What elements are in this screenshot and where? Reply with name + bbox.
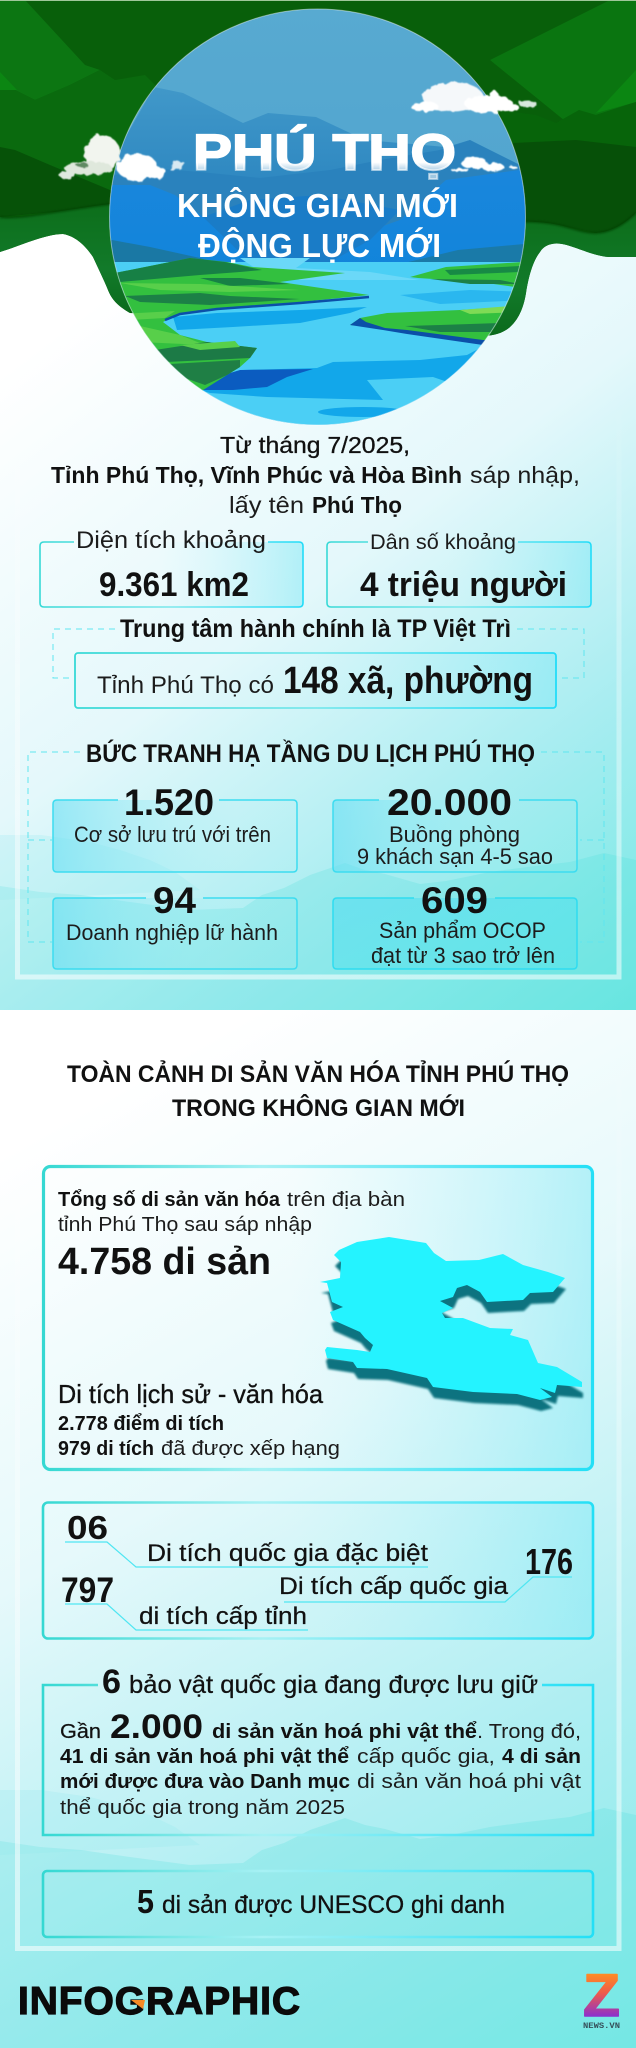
admin centre group: Trung tâm hành chính là TP Việt Trì <box>120 615 511 643</box>
intro text: lấy tên <box>229 492 304 518</box>
card: rooms: 9 khách sạn 4-5 sao <box>357 844 553 869</box>
panel: heritage total with map: 2.778 điểm di tích <box>58 1413 224 1435</box>
panel: heritage total with map: 979 di tích <box>58 1438 154 1460</box>
panel: relic classification <box>43 1502 593 1638</box>
panel: UNESCO: di sản được UNESCO ghi danh <box>162 1891 505 1919</box>
card: accommodation: Cơ sở lưu trú với trên <box>74 822 271 847</box>
panel: relic classification: 176 <box>525 1541 573 1582</box>
logo: Z News: Z <box>583 1962 620 2029</box>
card: travel companies <box>53 880 297 969</box>
background: top section gradient <box>0 0 636 1010</box>
panel: relic classification: 06 <box>67 1509 108 1546</box>
panel: national treasures and intangible heritage: 6 <box>102 1663 121 1701</box>
title <box>177 124 458 264</box>
panel: national treasures and intangible heritage: mới được đưa vào Danh mục <box>60 1771 350 1793</box>
panel: heritage total with map: đã được xếp hạng <box>161 1438 340 1460</box>
background: mountains lower section <box>0 1790 636 2048</box>
logo: Z News: NEWS.VN <box>583 2022 620 2031</box>
circle rim <box>110 9 526 425</box>
panel: national treasures and intangible heritage: Gần <box>60 1721 101 1743</box>
stat box: area: Diện tích khoảng <box>76 527 266 554</box>
card: OCOP: đạt từ 3 sao trở lên <box>371 943 555 968</box>
tourism heading with dashed frame: BỨC TRANH HẠ TẦNG DU LỊCH PHÚ THỌ <box>86 738 535 768</box>
stat box: area: 9.361 km2 <box>99 566 249 604</box>
panel: national treasures and intangible heritage: di sản văn hoá phi vật thể <box>212 1721 477 1743</box>
panel: national treasures and intangible heritage: thể quốc gia trong năm 2025 <box>60 1797 345 1819</box>
admin centre group: Tỉnh Phú Thọ có <box>97 672 274 699</box>
panel: national treasures and intangible heritage <box>43 1663 593 1835</box>
logo: INFOGRAPHIC wordmark: INFOGRAPHIC <box>18 1980 300 2023</box>
panel: relic classification: di tích cấp tỉnh <box>139 1603 307 1630</box>
section heading: TRONG KHÔNG GIAN MỚI <box>172 1094 465 1122</box>
intro text <box>51 432 580 518</box>
admin centre group <box>53 615 584 708</box>
stat box: area <box>40 527 303 607</box>
card: OCOP: Sản phẩm OCOP <box>379 918 546 943</box>
cloud: left <box>59 135 186 181</box>
tourism heading with dashed frame <box>28 738 604 942</box>
header: green hills with wavy edge <box>0 0 636 336</box>
panel: heritage total with map: Di tích lịch sử - văn hóa <box>58 1379 324 1409</box>
panel frame: lower section <box>18 1030 619 1948</box>
panel: relic classification: Di tích cấp quốc gia <box>279 1573 509 1600</box>
card: accommodation: 1.520 <box>124 782 214 823</box>
title: PHÚ THỌ <box>193 124 456 181</box>
panel: national treasures and intangible heritage: . Trong đó, <box>477 1721 581 1743</box>
intro text: Từ tháng 7/2025, <box>220 432 410 458</box>
panel: heritage total with map: 4.758 di sản <box>58 1241 271 1283</box>
title: ĐỘNG LỰC MỚI <box>198 226 441 264</box>
header: top edge line <box>0 0 636 1</box>
cloud: right top <box>411 82 537 113</box>
panel frame: top section <box>18 400 619 977</box>
panel: relic classification: 797 <box>61 1571 114 1610</box>
panel: UNESCO: 5 <box>137 1883 154 1920</box>
card: rooms: 20.000 <box>387 782 512 823</box>
stat box: population <box>327 531 591 607</box>
panel: relic classification: Di tích quốc gia đặc biệt <box>147 1540 428 1567</box>
panel: national treasures and intangible heritage: cấp quốc gia, <box>357 1746 495 1768</box>
card: travel companies: 94 <box>153 880 196 921</box>
section heading: TOÀN CẢNH DI SẢN VĂN HÓA TỈNH PHÚ THỌ <box>67 1059 569 1088</box>
intro text: sáp nhập, <box>470 462 580 488</box>
intro text: Phú Thọ <box>312 492 402 518</box>
card: accommodation <box>53 782 297 872</box>
panel: national treasures and intangible heritage: 4 di sản <box>502 1746 581 1768</box>
map: Phú Thọ province <box>320 1237 583 1411</box>
cloud: small right <box>451 157 517 172</box>
background: lower section gradient <box>0 1010 636 2048</box>
panel: national treasures and intangible heritage: di sản văn hoá phi vật <box>357 1771 581 1793</box>
stat box: population: 4 triệu người <box>360 566 567 604</box>
panel: national treasures and intangible heritage: 41 di sản văn hoá phi vật thể <box>60 1746 349 1768</box>
panel: national treasures and intangible heritage: bảo vật quốc gia đang được lưu giữ <box>129 1671 538 1699</box>
panel: heritage total with map: tỉnh Phú Thọ sau sáp nhập <box>58 1214 312 1236</box>
intro text: Tỉnh Phú Thọ, Vĩnh Phúc và Hòa Bình <box>51 462 462 488</box>
card: travel companies: Doanh nghiệp lữ hành <box>66 920 278 945</box>
card: OCOP: 609 <box>421 880 488 921</box>
panel: UNESCO <box>43 1871 593 1937</box>
panel: heritage total with map: Tổng số di sản văn hóa <box>58 1189 281 1211</box>
background: mountains top section <box>0 835 636 1010</box>
illustration: river landscape in circle <box>110 9 526 425</box>
title: KHÔNG GIAN MỚI <box>177 186 458 224</box>
card: rooms <box>333 782 577 872</box>
stat box: population: Dân số khoảng <box>370 531 516 554</box>
panel: heritage total with map: trên địa bàn <box>287 1189 405 1211</box>
section heading <box>67 1059 569 1122</box>
admin centre group: 148 xã, phường <box>283 660 533 702</box>
card: OCOP <box>333 880 577 969</box>
panel: national treasures and intangible heritage: 2.000 <box>110 1708 203 1746</box>
card: rooms: Buồng phòng <box>389 822 520 847</box>
panel: heritage total with map <box>44 1166 592 1470</box>
